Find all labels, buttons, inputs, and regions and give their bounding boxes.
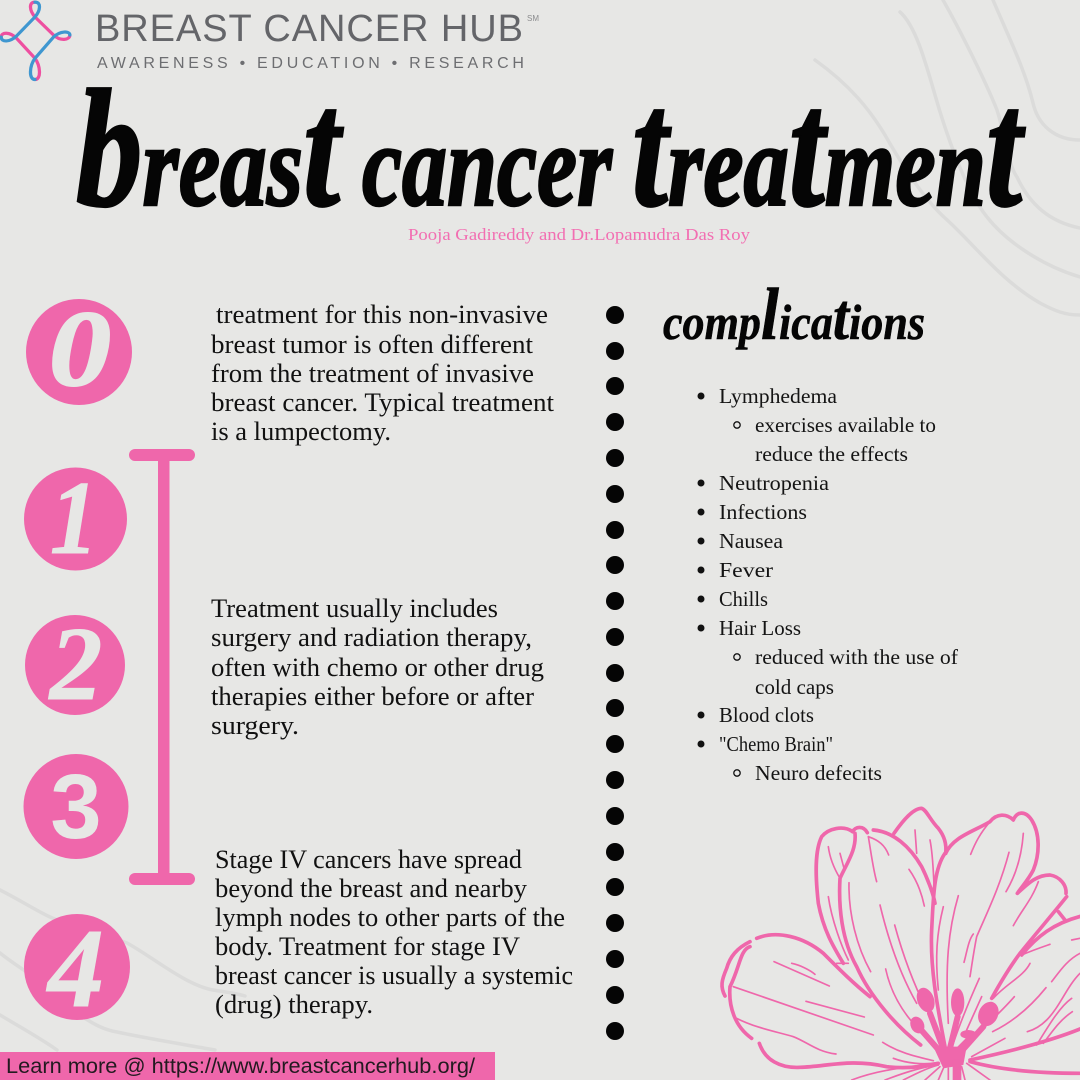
badge: stage 0 [26,290,132,409]
icon: ribbon knot [1,2,70,79]
text: stage 0 treatment: treatment for this non-invasive [216,300,548,329]
badge: stage 1: 1 [50,459,98,576]
authors: Pooja Gadireddy and Dr.Lopamudra Das Roy [408,225,751,244]
text: stage 4 treatment [215,845,573,1019]
complications list: Neuro defecits [755,761,882,785]
complications list: Lymphedema [719,384,838,408]
complications list: Hair Loss [719,616,801,640]
badge: stage 4: 4 [46,907,104,1031]
text: stage 4 treatment: (drug) therapy. [215,990,373,1019]
text: stages 1 to 3 treatment: surgery and radiation therapy, [211,623,532,652]
stage number badges [24,290,132,1031]
text: stage 4 treatment: breast cancer is usually a systemic [215,961,573,990]
complications list: Blood clots [719,703,814,727]
logo tagline: AWARENESS • EDUCATION • RESEARCH [97,55,524,72]
badge: stage 4 [24,907,130,1031]
complications list: reduce the effects [755,442,908,466]
badge: stage 3: 3 [50,756,102,858]
text: stage 4 treatment: lymph nodes to other parts of the [215,903,565,932]
badge: stage 2: 2 [48,605,102,722]
text: stages 1 to 3 treatment: Treatment usually includes [211,594,498,623]
footer bar [0,1052,495,1080]
service mark: SM [527,14,539,23]
text: stages 1 to 3 treatment: often with chemo or other drug [211,653,544,682]
complications list: Neutropenia [719,471,830,495]
text: stage 0 treatment [211,300,555,446]
bracket spanning stages 1 to 3 [129,449,195,885]
title: cancer [362,100,613,231]
text: stage 4 treatment: body. Treatment for stage IV [215,932,520,961]
text: stage 4 treatment: Stage IV cancers have spread [215,845,522,874]
title [76,56,1025,242]
text: stage 0 treatment: breast cancer. Typical treatment [211,388,555,417]
badge: stage 1 [24,459,127,576]
complications list: cold caps [755,675,834,699]
heading: complications: complications [663,274,925,356]
badge: stage 3 [24,754,128,859]
complications list: Chills [719,587,768,611]
text: stage 0 treatment: from the treatment of invasive [211,359,534,388]
title: breast [76,56,343,242]
text: stage 0 treatment: breast tumor is often different [211,330,534,359]
badge: stage 0: 0 [49,290,111,409]
text: stage 0 treatment: is a lumpectomy. [211,417,391,446]
badge: stage 2 [25,605,125,722]
complications list: reduced with the use of [755,645,958,669]
title: treatment [632,56,1025,242]
complications list [698,384,958,785]
complications list: exercises available to [755,413,936,437]
text: stages 1 to 3 treatment: therapies either before or after [211,682,534,711]
logo: Breast Cancer Hub [1,2,539,79]
complications list: "Chemo Brain" [719,732,833,756]
complications list: Infections [719,500,807,524]
complications list: Nausea [719,529,784,553]
complications list: Fever [719,558,773,582]
text: stages 1 to 3 treatment: surgery. [211,711,299,740]
illustration: pink flower [722,808,1080,1080]
dotted divider [606,306,624,1040]
text: stages 1 to 3 treatment [211,594,544,740]
text: stage 4 treatment: beyond the breast and nearby [215,874,527,903]
footer link text: Learn more @ https://www.breastcancerhub.org/ [6,1054,475,1078]
logo wordmark: BREAST CANCER HUB [95,8,523,50]
